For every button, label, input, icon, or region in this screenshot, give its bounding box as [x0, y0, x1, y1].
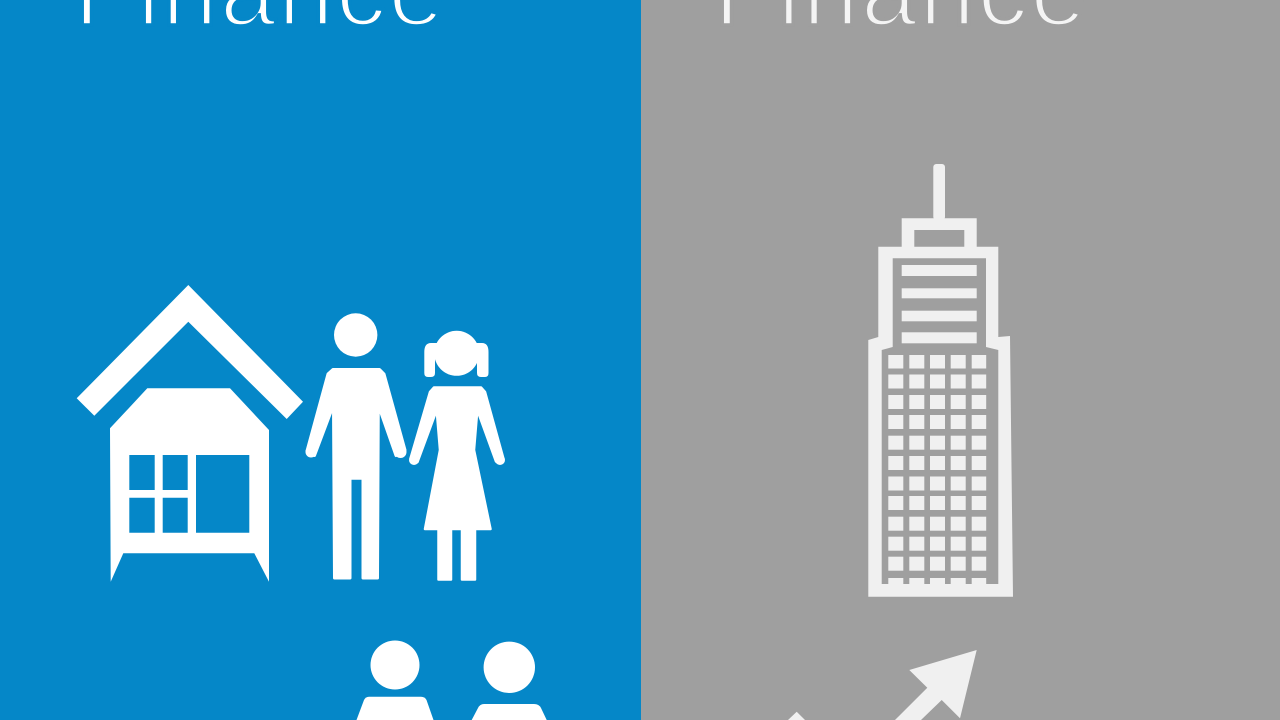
icon: two people, cropped: [356, 640, 547, 720]
icon: house: [77, 285, 303, 582]
panel: corporate finance (gray): [641, 0, 1280, 720]
building windows grid: [888, 355, 986, 585]
panel: personal finance (blue): [0, 0, 641, 720]
arrow: rising growth trend, cropped: [788, 650, 977, 720]
icon: adult figure: [306, 313, 406, 578]
icon: skyscraper: [868, 164, 1013, 597]
icon: child figure: [409, 331, 505, 580]
